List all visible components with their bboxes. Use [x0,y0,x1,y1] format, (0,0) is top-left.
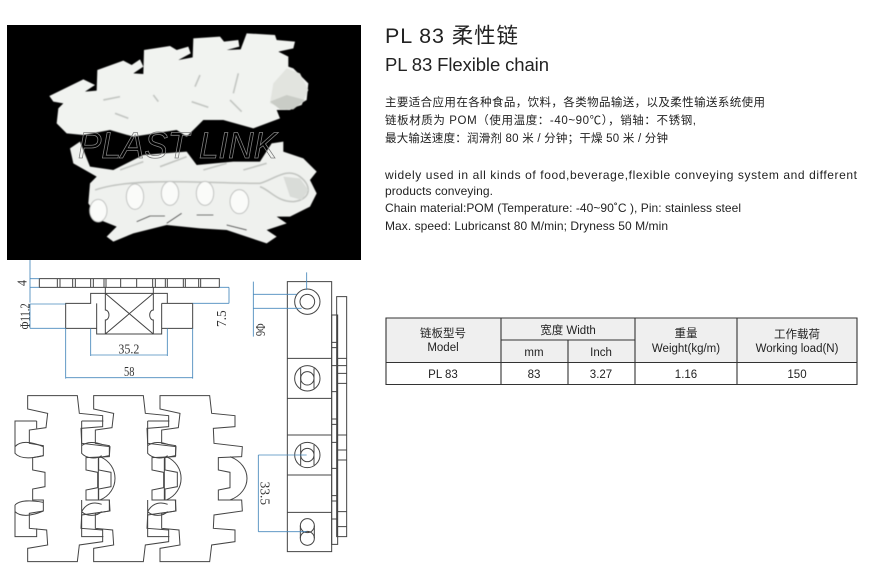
specification table [386,318,857,384]
table data row: 1.16 [675,369,697,381]
table data row: 3.27 [590,369,612,381]
table header [420,323,839,359]
technical drawing: top view of chain links [15,396,247,562]
Chinese description: 链板材质为 POM（使用温度：-40~90℃），销轴：不锈钢, [385,113,696,127]
product photo: white flexible chain on black [7,25,361,260]
English description [384,168,858,233]
table header: Model [427,342,459,354]
Chinese description [385,95,765,145]
table header: 工作载荷 [774,328,820,341]
dimension labels [15,279,229,379]
dimension labels: 4 [15,279,30,286]
title block [385,24,549,75]
dimension lines [30,260,229,379]
table header: Working load(N) [756,343,839,355]
watermark: PLAST LINK: PLAST LINK [78,125,279,166]
English description: Chain material:POM (Temperature: -40~90˚C ), Pin: stainless steel [385,201,741,215]
dimension labels: 35.2 [118,342,139,356]
English description: widely used in all kinds of food,beverage,flexible conveying system and different [384,168,858,182]
table data row [428,369,807,381]
technical drawing: front section view with dimensions [15,260,229,379]
table header: mm [524,347,544,359]
table header: 重量 [674,326,698,340]
dimension labels: 33.5 [258,482,273,505]
dimension labels: Φ6 [253,323,268,336]
English description: products conveying. [385,184,493,198]
Chinese description: 主要适合应用在各种食品，饮料，各类物品输送，以及柔性输送系统使用 [385,95,765,109]
pin holes [295,289,320,545]
table header: Weight(kg/m) [652,343,720,355]
dimension labels: 7.5 [214,310,229,327]
technical drawing: side view with dimensions [253,272,347,552]
table data row: 150 [787,369,807,381]
dimension labels [253,323,273,505]
table data row: 83 [528,369,540,381]
dimension lines [253,272,307,532]
heading: Chinese title: PL 83 柔性链 [385,24,518,48]
English description: Max. speed: Lubricanst 80 M/min; Dryness 50 M/min [385,219,668,233]
dimension labels: Φ11.2 [17,303,33,329]
table header: 链板型号 [420,326,466,340]
table header: Inch [590,347,612,359]
upper chain section [49,33,308,137]
table data row: PL 83 [428,369,458,381]
table header: 宽度 Width [540,323,596,337]
Chinese description: 最大输送速度：润滑剂 80 米 / 分钟；干燥 50 米 / 分钟 [385,131,668,145]
heading: English title: PL 83 Flexible chain [385,54,549,75]
dimension labels: 58 [124,364,134,379]
lower chain section [70,142,317,243]
pins and bulges [15,421,43,537]
